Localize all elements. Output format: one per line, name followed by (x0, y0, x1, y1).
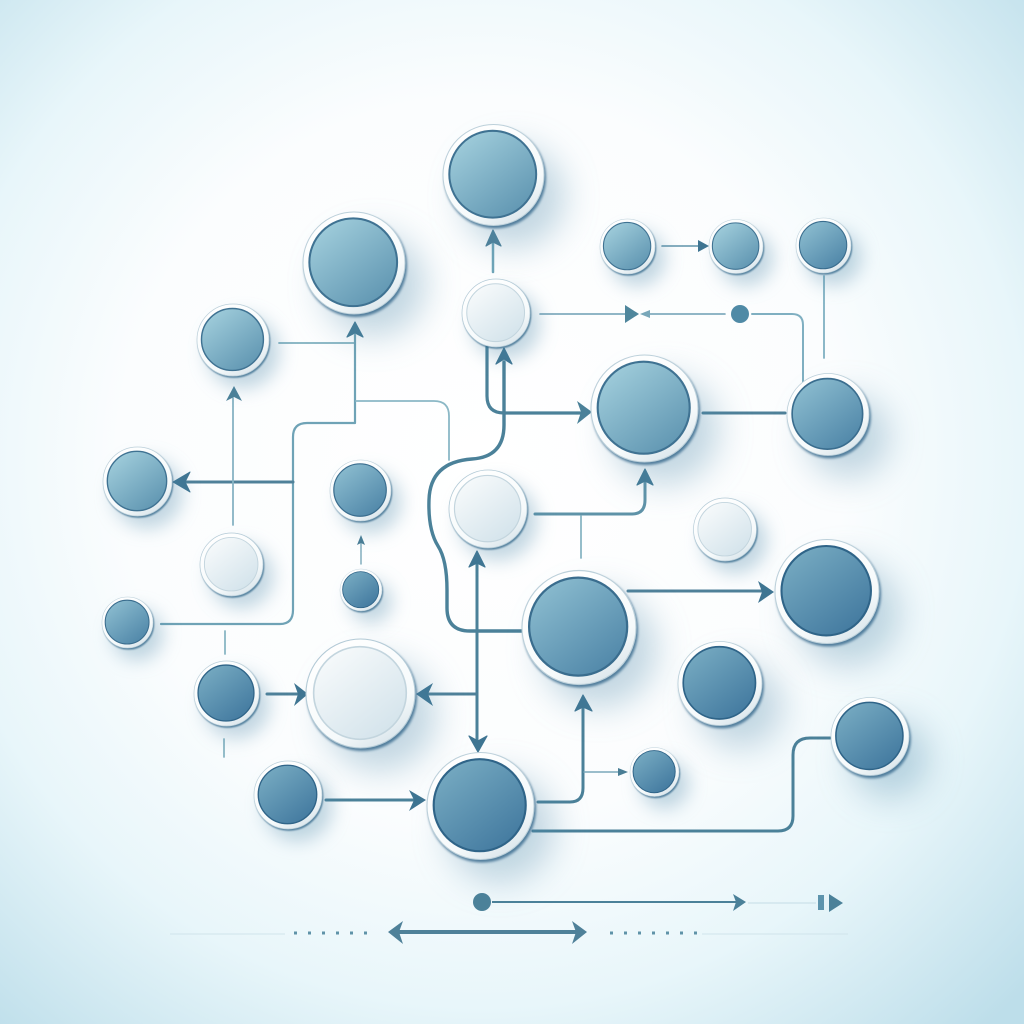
connector: dot with left arrow and elbow (640, 305, 803, 382)
node: small bottom (630, 748, 679, 796)
node: small top row 3 (796, 218, 851, 273)
connector: blue node to large pale node (267, 683, 308, 706)
node: small left (102, 597, 153, 648)
connector: top white node up to top node (486, 230, 501, 272)
legend: faint line with end marker (748, 894, 843, 912)
node: mid small (330, 460, 391, 521)
connector: lower node up to large central (538, 695, 592, 802)
connector: arrow left to large pale node (416, 683, 477, 706)
connector: lower node to far right node (533, 738, 830, 831)
node: small top row 1 (600, 219, 655, 274)
node: top large (443, 124, 544, 226)
legend: double arrow (388, 921, 587, 944)
node: central large (522, 570, 636, 684)
connector: small arrow between mid nodes (357, 535, 365, 564)
connector: arrow left to far-left node (173, 472, 293, 492)
legend: dot arrow (473, 893, 746, 911)
node: lower right (678, 642, 762, 726)
node: white top center (462, 279, 530, 347)
node: large pale (306, 639, 415, 748)
connector: white node down and right to large node (487, 347, 592, 424)
legend: left dotted rule (170, 933, 368, 934)
connector: small node row arrow (662, 240, 709, 252)
node: left upper (197, 304, 269, 376)
connector: long path from small left node up to large node (161, 322, 363, 624)
node: white right (694, 498, 756, 561)
connector: white node to right arrow (540, 305, 639, 323)
connector: left node to top-left large node (279, 342, 355, 344)
legend: right dotted rule (610, 933, 848, 934)
node: white center (449, 470, 527, 548)
connector: short vertical line (580, 516, 582, 558)
node: far right (787, 374, 869, 456)
connector: large central node to right node (628, 581, 774, 603)
node: far left (103, 447, 172, 516)
connector: white node to blue node elbow (535, 469, 653, 514)
node: far lower right (831, 698, 909, 776)
connector: vertical line under top right node (823, 276, 825, 358)
connector: lower left node to central lower node (326, 790, 426, 811)
node: right large (775, 540, 879, 644)
connector: ticks around node (224, 631, 225, 757)
connector: double vertical arrow (469, 551, 487, 752)
node: right center large (591, 355, 698, 462)
node: tiny mid (340, 569, 382, 611)
connector: curved main line from white node to central (429, 348, 522, 631)
connector: branch to central line (356, 401, 449, 460)
node: lower left (194, 661, 259, 726)
connectors (161, 230, 830, 831)
legend: bottom arrows (170, 893, 848, 944)
node: bottom left (254, 761, 322, 829)
connector: pale node up to left node (226, 386, 242, 525)
node: bottom central (427, 752, 534, 860)
node: small top row 2 (709, 220, 763, 274)
node: white left (200, 533, 263, 596)
connector: small arrow to small node (584, 768, 628, 776)
node: upper left large (303, 212, 405, 314)
connector: blue to right nodes (703, 412, 785, 414)
